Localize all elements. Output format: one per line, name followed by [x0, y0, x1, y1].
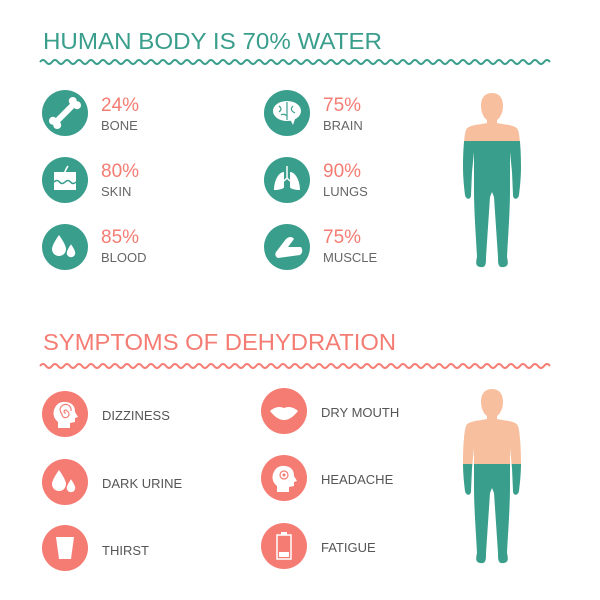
item: bone: 24%	[101, 95, 139, 116]
item: brain: 75%	[323, 95, 361, 116]
item: blood	[42, 224, 147, 270]
item: lungs	[264, 157, 368, 203]
item: dizziness	[42, 391, 170, 437]
item: bone	[42, 90, 139, 136]
item: blood: 85%	[101, 227, 139, 248]
figure: dehydrated body	[463, 389, 521, 563]
title: symptoms of dehydration: SYMPTOMS OF DEHYDRATION	[43, 329, 396, 355]
item: muscle: 75%	[323, 227, 361, 248]
item: dark urine	[42, 459, 183, 505]
item: lungs: 90%	[323, 161, 361, 182]
item: headache	[261, 455, 394, 501]
title: human body is 70% water: HUMAN BODY IS 70% WATER	[43, 28, 382, 54]
item: blood: BLOOD	[101, 250, 147, 265]
item: brain: BRAIN	[323, 118, 363, 133]
item: thirst	[42, 525, 149, 571]
item: fatigue	[261, 523, 376, 569]
item: dark urine: DARK URINE	[102, 476, 183, 491]
item: dizziness: DIZZINESS	[102, 408, 170, 423]
item: thirst: THIRST	[102, 543, 149, 558]
item: lungs: LUNGS	[323, 184, 368, 199]
item: fatigue: FATIGUE	[321, 540, 376, 555]
item: skin	[42, 157, 139, 203]
item: muscle	[264, 224, 378, 270]
item: bone: BONE	[101, 118, 138, 133]
item: headache: HEADACHE	[321, 472, 394, 487]
item: muscle: MUSCLE	[323, 250, 378, 265]
item: dry mouth: DRY MOUTH	[321, 405, 399, 420]
figure: body 70% water	[463, 93, 521, 267]
item: dry mouth	[261, 388, 399, 434]
item: skin: 80%	[101, 161, 139, 182]
item: brain	[264, 90, 363, 136]
item: skin: SKIN	[101, 184, 131, 199]
